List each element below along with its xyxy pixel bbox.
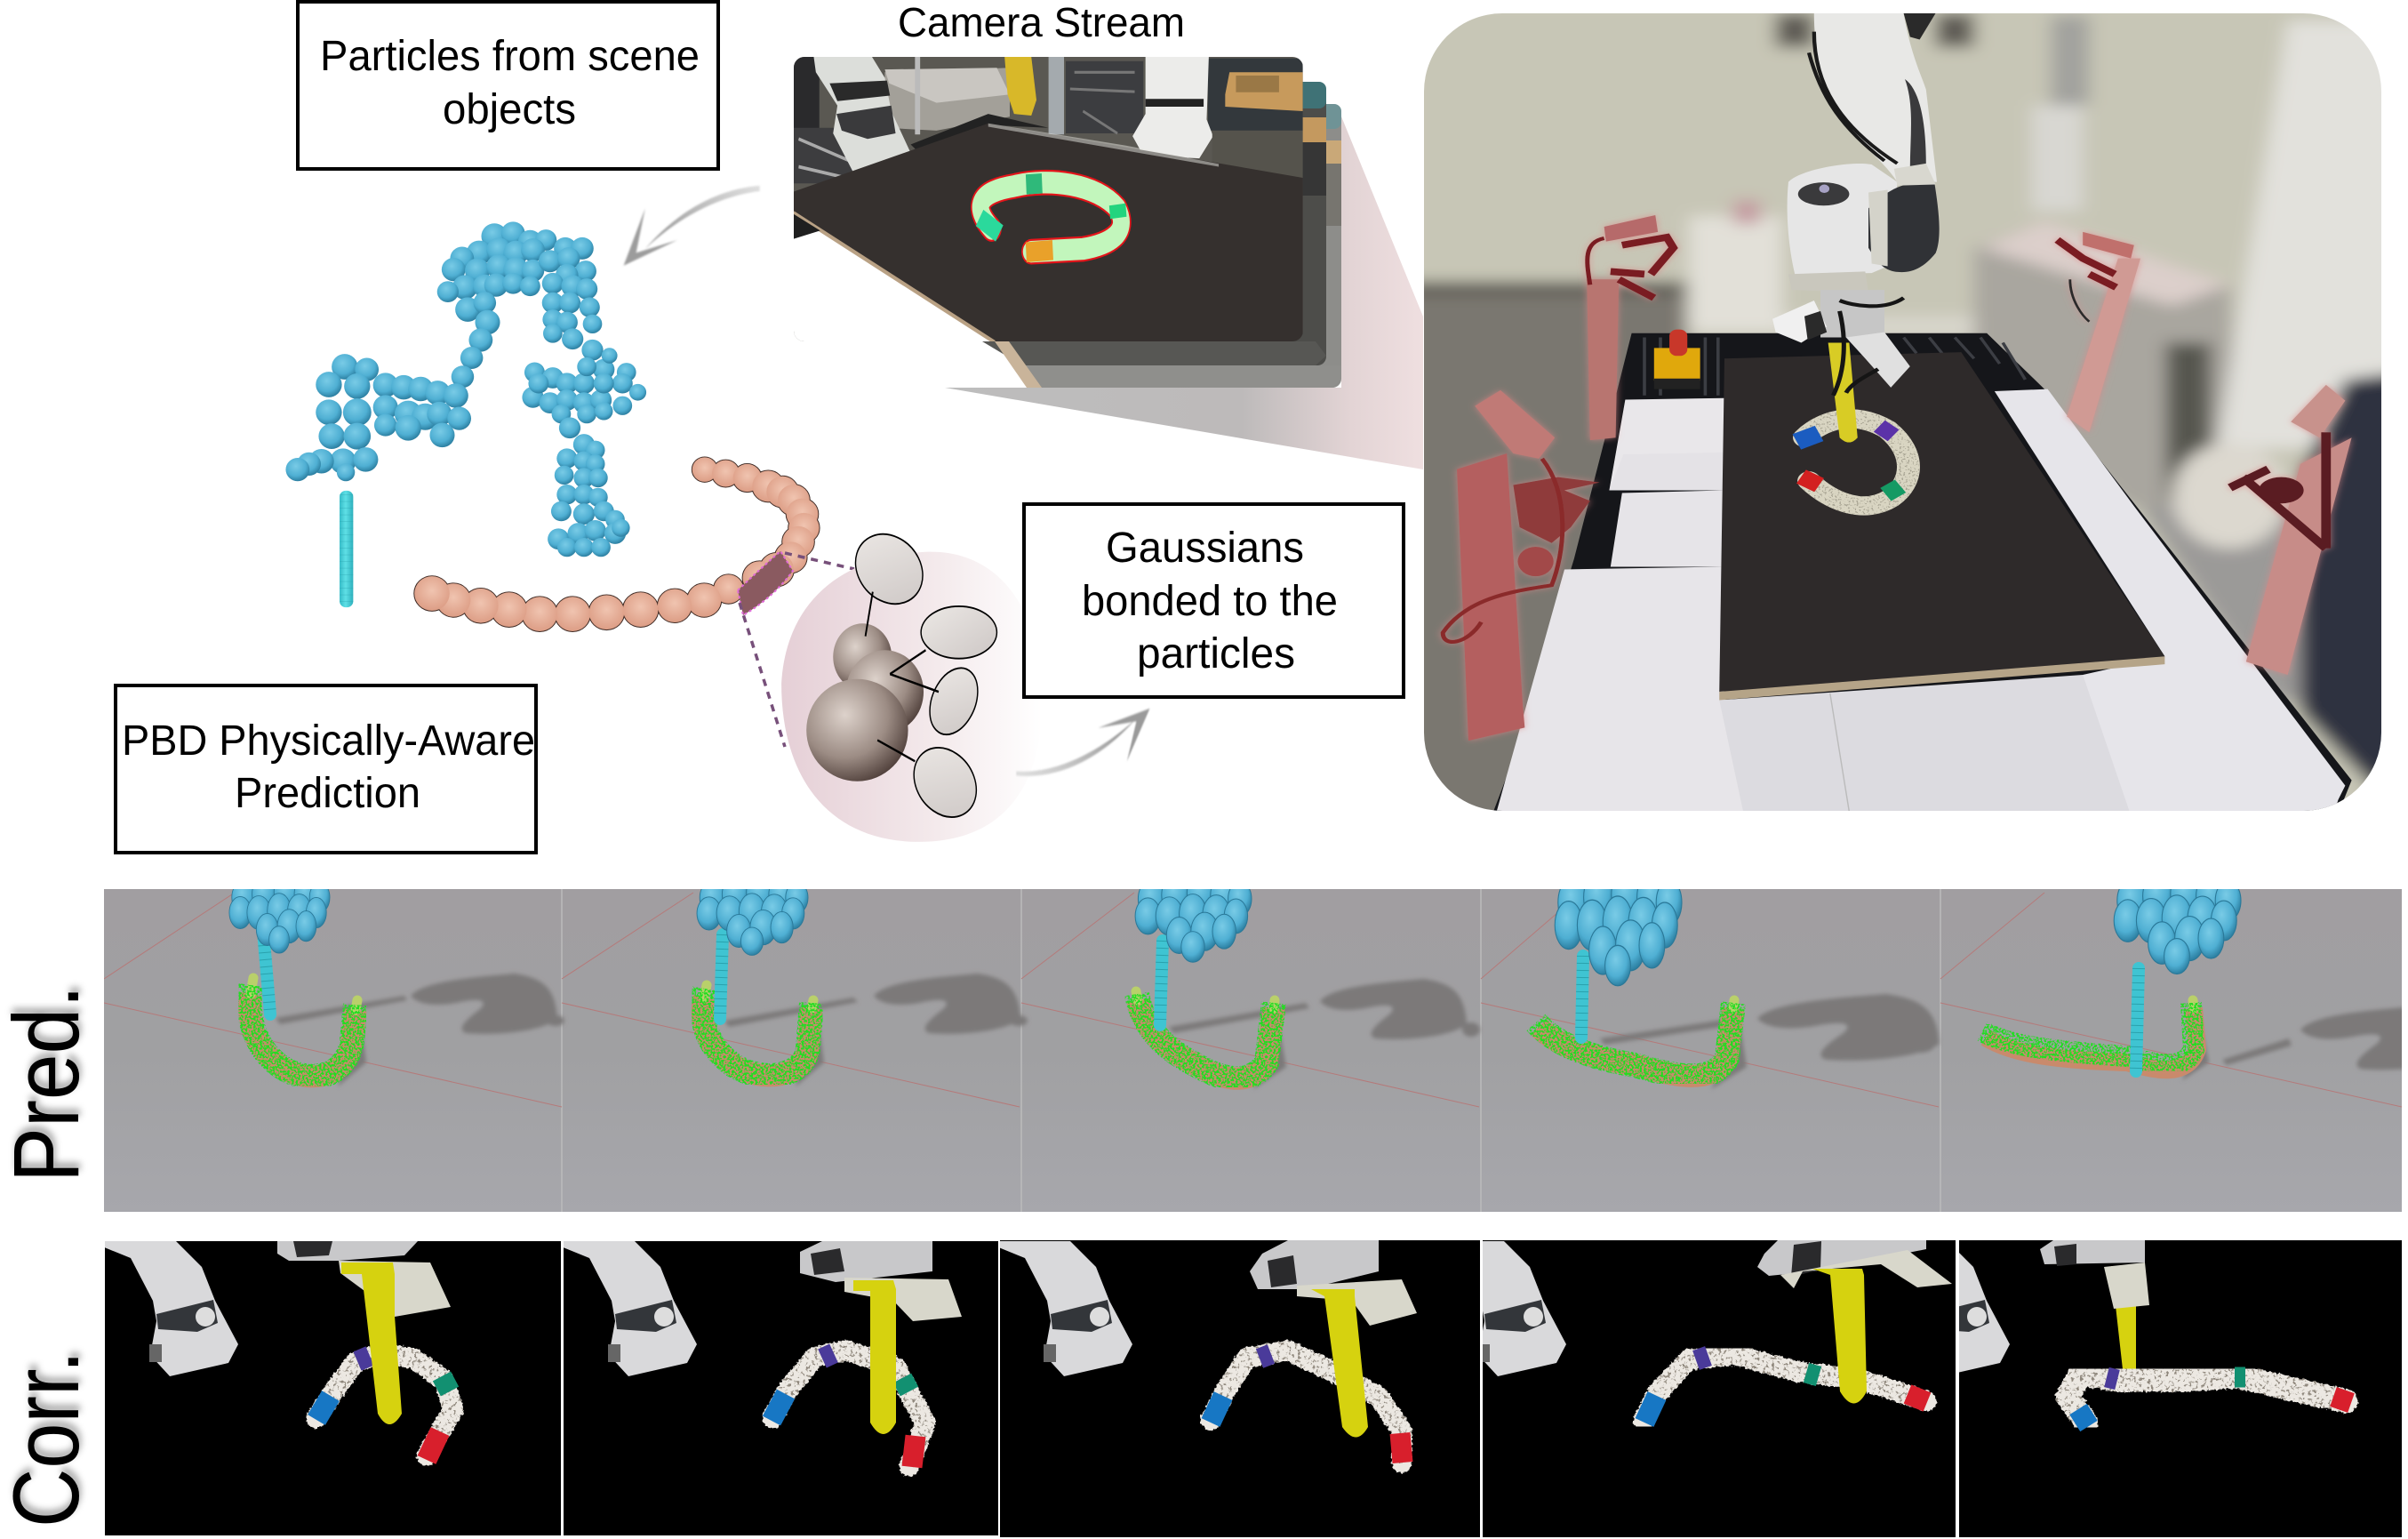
particle tool stick [340,491,353,607]
prediction frame 2 [562,875,1028,1107]
zoom blob [781,552,1042,842]
camera stand back left [1587,215,1673,440]
camera stand back right [2057,232,2140,432]
wrist and base spheres [522,348,646,557]
callout: gaussians bonded to the particles: particles [1137,630,1295,677]
camera stand front right [2230,385,2352,675]
robot arm [1772,13,1940,396]
callout: particles from scene objects: objects [443,86,576,133]
particle robot arm [285,221,646,557]
panel: prediction row [104,870,2408,1212]
particle spheres [806,623,924,782]
arrow: gaussians to callout [1016,709,1150,776]
segmented rope [980,182,1126,252]
middle frame [982,82,1326,388]
dashed zoom lines [740,553,854,747]
callout: PBD physically-aware prediction: PBD Physically-Aware [122,717,535,765]
front frame photo [794,57,1303,342]
arrow: camera stream to particles [624,186,760,266]
back frame [1022,104,1341,388]
panel: gaussians bonded to particles [781,523,1042,842]
emergency stop [1654,330,1700,389]
callout: particles from scene objects [298,2,718,169]
gaussian ellipsoids [848,523,996,830]
panel: robot workspace photo [1404,0,2408,844]
callout: PBD physically-aware prediction [116,685,536,853]
bond lines [866,592,939,761]
rope ring [1796,419,1908,506]
blurred lab background [1404,0,2408,844]
table rails [1481,333,2352,844]
correction frame 1 [89,1241,561,1535]
correction frame 3 [983,1240,1480,1537]
prediction frame 4 [1481,870,1940,1107]
forearm spheres [285,354,471,481]
callout: gaussians bonded to the particles: Gaussians [1106,525,1304,572]
callout: gaussians bonded to the particles: bonded to the [1082,578,1338,625]
highlighted rope section [738,551,793,615]
prediction frame 3 [1021,874,1480,1107]
white table sheets [1488,389,2345,844]
heading: camera stream: Camera Stream [898,0,1185,45]
callout: gaussians bonded to the particles [1024,504,1404,697]
prediction frame 5 [1940,871,2408,1107]
correction frame 4 [1483,1240,1956,1537]
connector wedge from camera stream to photo [945,116,1423,469]
correction frame 5 [1959,1240,2402,1537]
upper arm spheres [437,221,604,388]
panel: camera stream frames [794,57,1341,388]
correction frame 2 [548,1241,998,1535]
particle rope chain [414,457,820,631]
camera stand front left [1443,390,1600,741]
prediction frame 1 [104,876,564,1107]
callout: PBD physically-aware prediction: Prediction [235,770,420,817]
black board [1719,352,2164,701]
yellow tool [1828,342,1858,443]
callout: particles from scene objects: Particles from scene [320,33,700,80]
